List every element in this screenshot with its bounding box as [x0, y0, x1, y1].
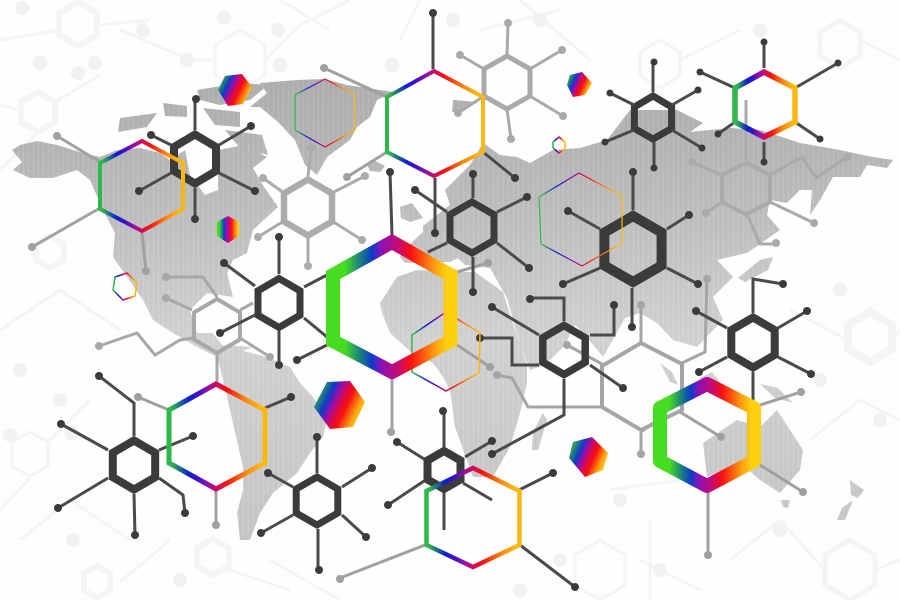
New Guinea: [760, 384, 793, 403]
light molecule: below Greenland: [254, 144, 369, 270]
dark molecule: North America: [135, 95, 259, 223]
Eurasia: [400, 110, 893, 370]
light molecule: Siberia: [688, 100, 851, 247]
light molecule: Central America: [95, 273, 274, 382]
outline rainbow hexagons: [100, 71, 795, 567]
dark molecule: lower left: [54, 372, 197, 539]
dark molecule: Asia large: [559, 168, 702, 331]
Great Britain and Ireland: [400, 203, 423, 222]
light molecule: Indian Ocean: [493, 275, 711, 458]
Sumatra and Borneo: [660, 363, 722, 392]
Africa: [380, 270, 527, 477]
dark molecule: South East Asia: [692, 38, 842, 402]
thin rainbow hexagons: [113, 79, 622, 391]
light molecule: top centre: [454, 19, 567, 143]
large rainbow hexagon: centre: [333, 242, 450, 372]
dark molecule: Russia: [602, 58, 706, 172]
Madagascar: [532, 413, 547, 450]
North America: [12, 141, 278, 357]
dark molecule: west of big hexagon: [216, 233, 327, 369]
Iceland: [367, 161, 385, 172]
dark molecule: lower centre: [257, 393, 376, 574]
grey connecting strokes: [28, 64, 807, 583]
Greenland: [250, 79, 393, 175]
South America: [217, 350, 327, 540]
dark molecule: Europe: [386, 9, 533, 296]
Svalbard: [452, 100, 478, 112]
solid rainbow hexagons: [217, 72, 608, 477]
map stripe texture: [12, 79, 893, 540]
Australia: [703, 410, 803, 493]
Japan: [738, 257, 773, 282]
New Zealand: [837, 480, 864, 520]
Tasmania: [781, 500, 790, 508]
large rainbow hexagon: Australia: [660, 384, 754, 486]
Canadian Arctic islands: [118, 83, 268, 155]
world map: [12, 79, 893, 540]
dark molecule: Middle East: [476, 295, 627, 458]
dark molecule: South Atlantic: [384, 407, 579, 591]
